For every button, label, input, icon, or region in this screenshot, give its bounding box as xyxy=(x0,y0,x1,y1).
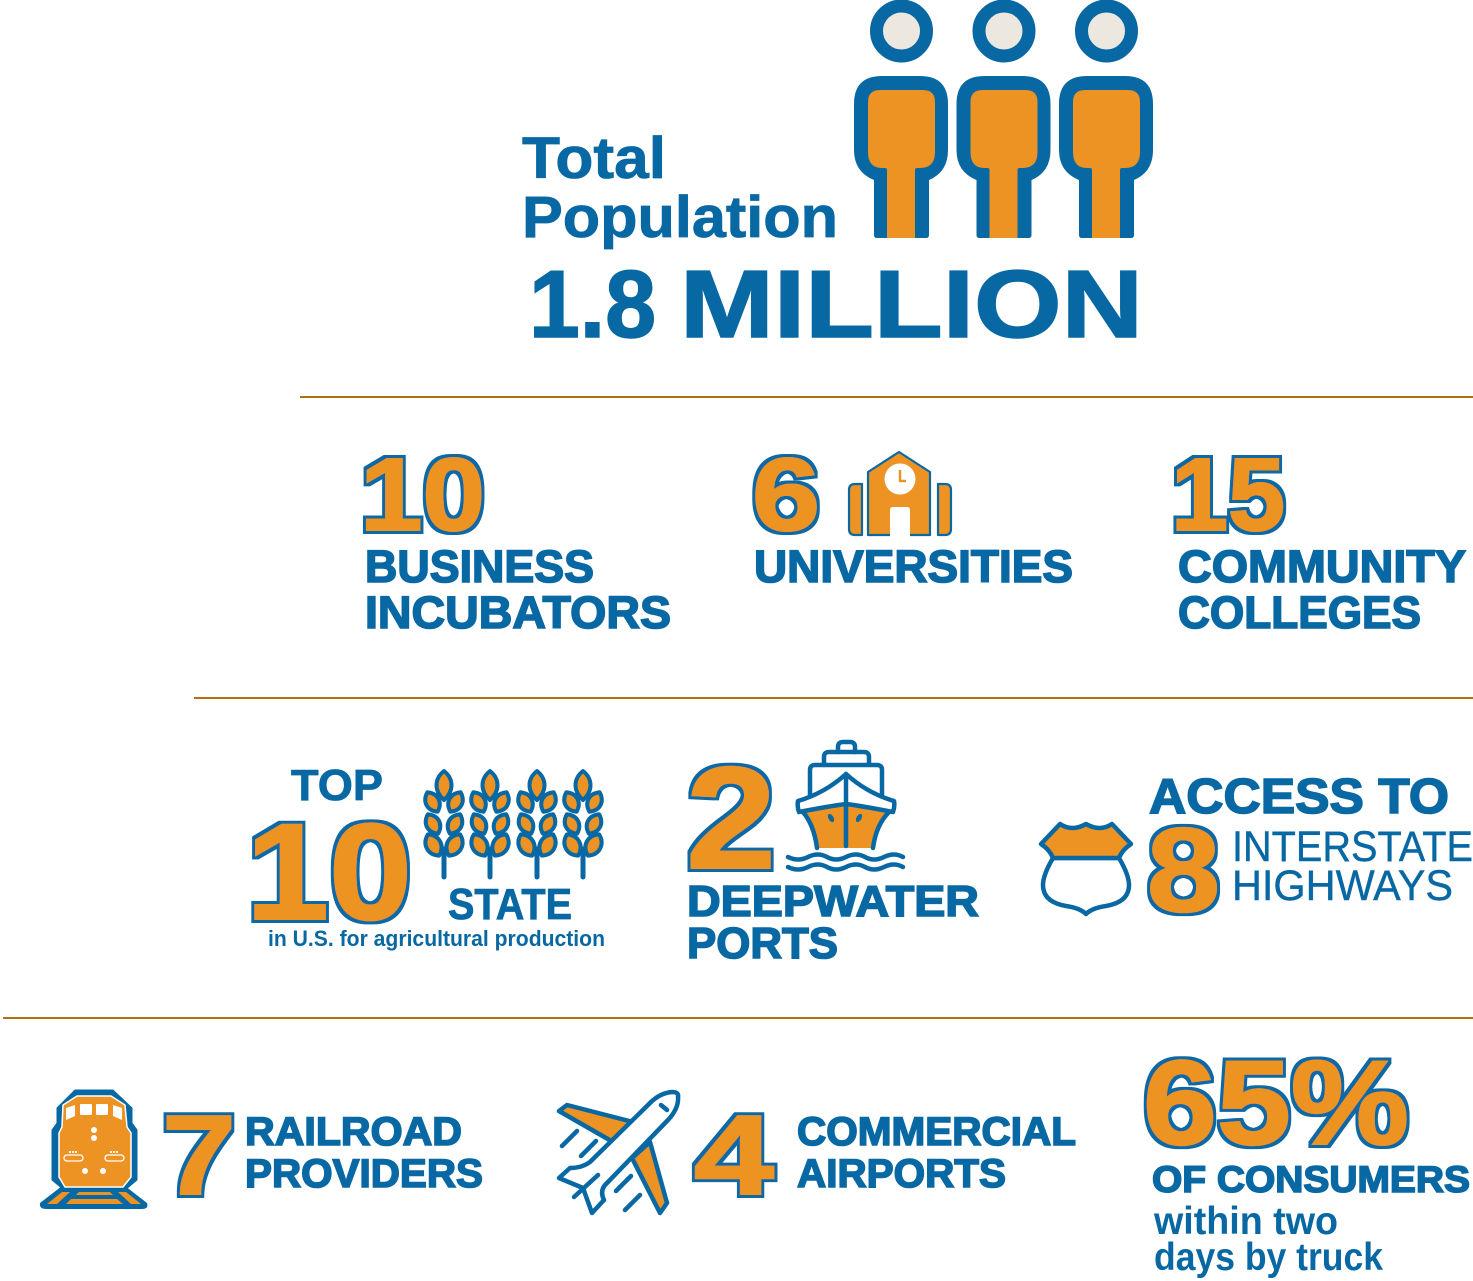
figure: 1.8 million xyxy=(529,251,1143,358)
stat: commercial airports: 4 xyxy=(694,1092,774,1218)
stat: community colleges: COLLEGES xyxy=(1178,587,1421,638)
stat: business incubators xyxy=(360,437,671,638)
icon: airplane xyxy=(559,1092,678,1213)
stat: deepwater ports: DEEPWATER xyxy=(687,877,979,926)
stat: business incubators: 10 xyxy=(360,437,485,552)
icon: ship xyxy=(788,742,903,870)
divider 2 xyxy=(194,697,1473,699)
figure: 1.8 million: 1.8 xyxy=(529,251,656,358)
stat: universities xyxy=(752,437,1073,592)
stat: deepwater ports: PORTS xyxy=(687,919,838,968)
icon: three people xyxy=(854,6,1153,238)
icon: highway shield xyxy=(1041,824,1131,914)
stat: community colleges: COMMUNITY xyxy=(1178,541,1466,592)
stat: top 10 state: STATE xyxy=(448,880,572,929)
icon: locomotive xyxy=(40,1090,147,1209)
icon: wheat stalks xyxy=(421,771,606,877)
stat: universities: UNIVERSITIES xyxy=(754,541,1073,592)
stat: commercial airports xyxy=(559,1092,1076,1218)
divider 1 xyxy=(300,396,1473,398)
stat: top 10 state: 10 xyxy=(246,796,412,949)
stat: community colleges: 15 xyxy=(1171,437,1285,552)
heading: total population: Population xyxy=(522,185,838,250)
stat: consumers within two days by truck xyxy=(1143,1036,1470,1279)
icon: university building xyxy=(849,452,951,537)
stat: interstate highways: ACCESS TO xyxy=(1149,770,1449,824)
stat: commercial airports: COMMERCIAL xyxy=(797,1110,1076,1154)
stat: railroad providers: 7 xyxy=(162,1092,236,1218)
stat: interstate highways: 8 xyxy=(1147,804,1220,937)
stat: universities: 6 xyxy=(752,437,820,552)
stat: consumers within two days by truck: within two xyxy=(1153,1200,1338,1243)
stat: consumers within two days by truck: OF CONSUMERS xyxy=(1152,1159,1470,1200)
stat: top 10 state xyxy=(246,761,606,951)
stat: railroad providers xyxy=(40,1090,483,1218)
stat: business incubators: INCUBATORS xyxy=(365,587,671,638)
stat: consumers within two days by truck: 65% xyxy=(1143,1036,1409,1170)
stat: interstate highways: HIGHWAYS xyxy=(1232,862,1453,910)
stat: deepwater ports: 2 xyxy=(686,737,776,899)
stat: business incubators: BUSINESS xyxy=(365,541,594,592)
stat: commercial airports: AIRPORTS xyxy=(797,1152,1006,1196)
stat: interstate highways xyxy=(1041,770,1473,937)
stat: consumers within two days by truck: days by truck xyxy=(1154,1236,1383,1279)
stat: top 10 state: in U.S. for agricultural production xyxy=(268,926,605,951)
heading: total population: Total xyxy=(522,126,666,191)
stat: community colleges xyxy=(1171,437,1466,638)
stat: railroad providers: PROVIDERS xyxy=(245,1152,483,1196)
figure: 1.8 million: MILLION xyxy=(680,251,1143,358)
stat: top 10 state: TOP xyxy=(291,761,383,810)
stat: railroad providers: RAILROAD xyxy=(245,1110,462,1154)
divider 3 xyxy=(3,1017,1473,1019)
stat: deepwater ports xyxy=(686,737,979,968)
heading: total population xyxy=(522,126,838,250)
